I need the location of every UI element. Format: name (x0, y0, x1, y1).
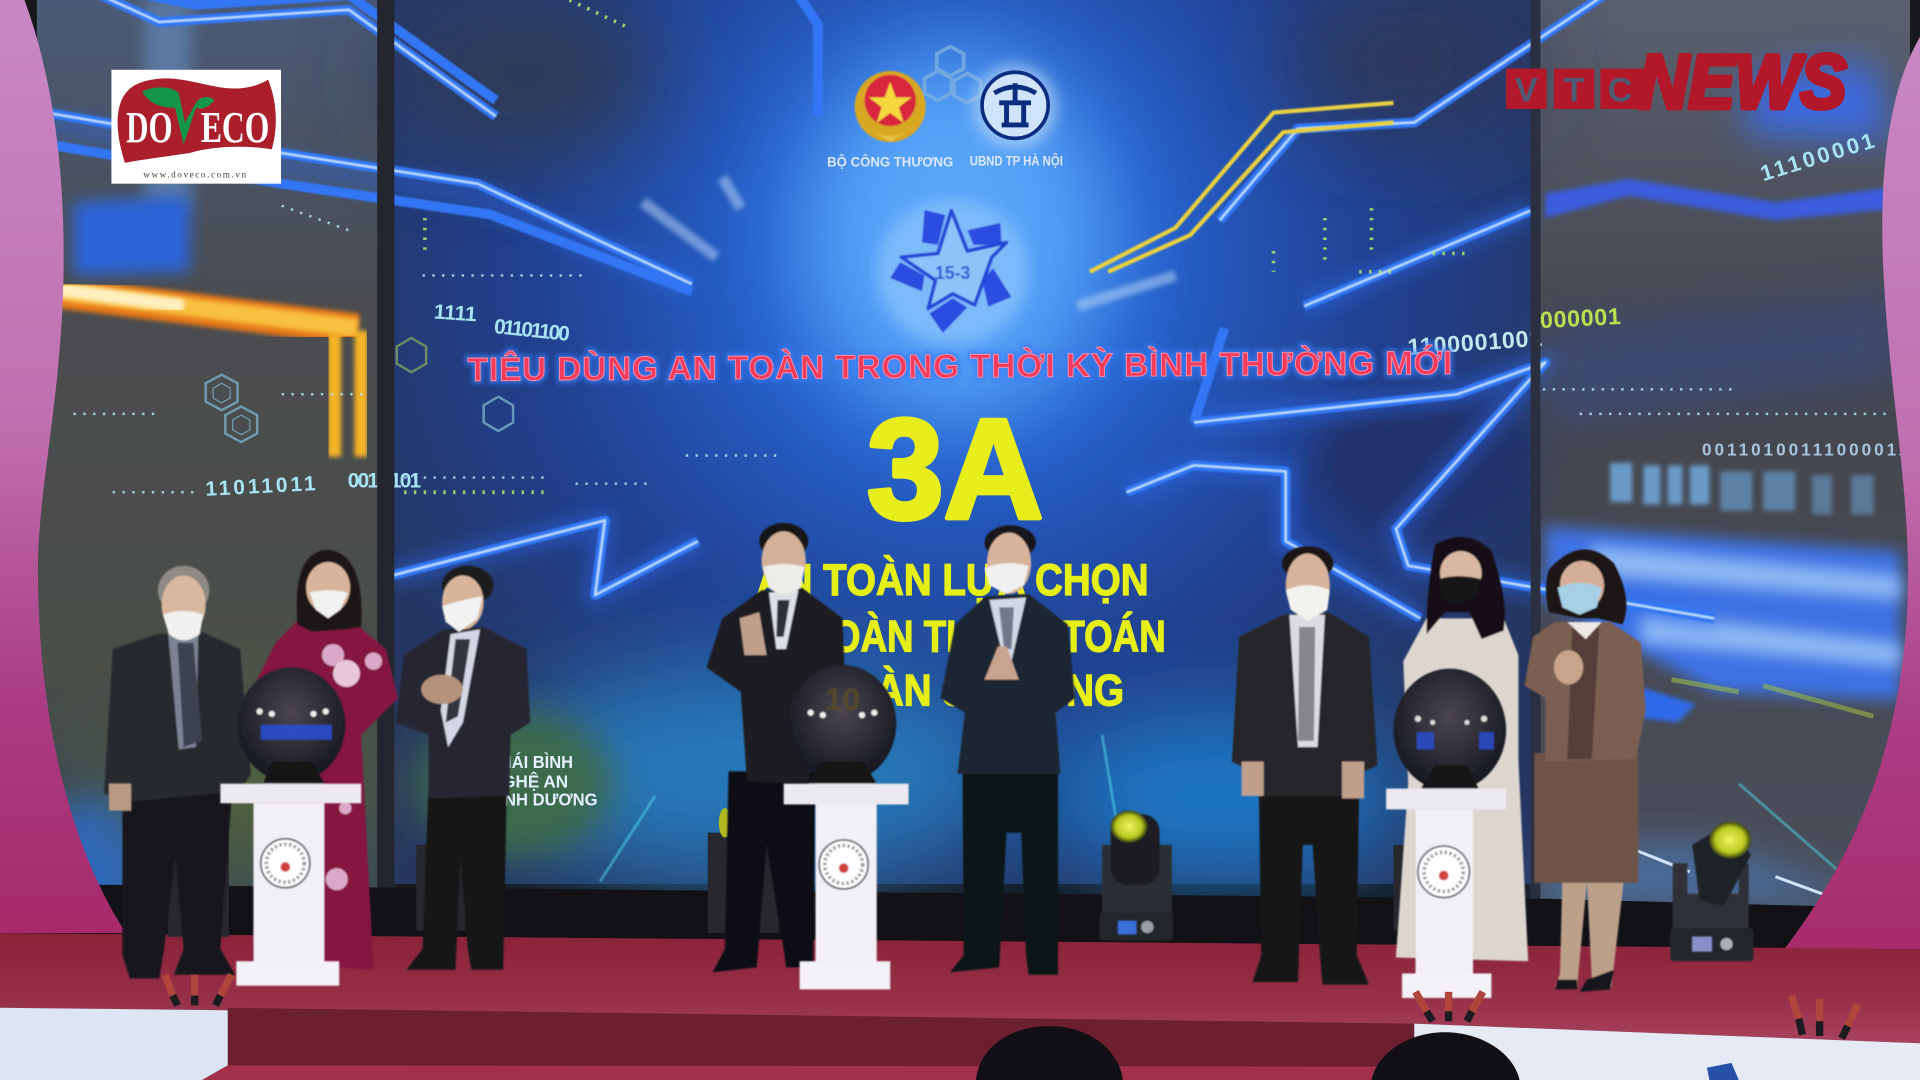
campaign headline: TIÊU DÙNG AN TOÀN TRONG THỜI KỲ BÌNH THƯỜNG MỚI (468, 344, 1452, 389)
person 6: man with striped tie (1232, 546, 1378, 984)
province list: NGHỆ AN (490, 771, 568, 791)
brand name continued: ECO (201, 103, 269, 152)
audience heads (976, 1026, 1520, 1080)
brand name: DO (126, 103, 173, 152)
black stage backing band (0, 884, 1910, 967)
binary digit decorations: 11011011 (205, 472, 316, 501)
campaign pillars text: AN TOÀN LỰA CHỌN (757, 555, 1149, 605)
pedestal logo (819, 840, 868, 889)
button sphere (789, 665, 896, 782)
organiser emblem: Hanoi (973, 65, 1057, 148)
pedestal column (1416, 809, 1473, 975)
back moving lights (168, 807, 1408, 937)
province list: THÁI BÌNH (490, 752, 573, 772)
VTC News logo: T (1564, 72, 1585, 110)
campaign headline: TIÊU DÙNG AN TOÀN TRONG THỜI KỲ BÌNH THƯỜNG MỚI (468, 344, 1452, 389)
pedestal base (236, 961, 339, 986)
dotted speckles (73, 0, 1886, 492)
pedestal 2 (784, 665, 909, 989)
15-3 star logo: 15-3 (935, 262, 970, 283)
person 3: man clapping (396, 566, 530, 970)
legs (122, 784, 235, 978)
right screen panel (1540, 0, 1910, 909)
pedestal base (800, 961, 890, 989)
stage floor (0, 933, 1920, 1043)
DOVECO logo (111, 70, 281, 184)
pink left wall (0, 0, 126, 933)
campaign pillars text (747, 555, 1166, 715)
button sphere (238, 667, 345, 782)
campaign pillars text: AN TOÀN THANH TOÁN (747, 611, 1166, 661)
screen pillars (377, 0, 1540, 906)
pedestal column (816, 804, 877, 964)
V T C boxes (1506, 69, 1547, 109)
pedestal cap (784, 784, 909, 804)
pedestal logo (1418, 846, 1469, 898)
circuit lines (47, 0, 1849, 904)
organiser emblem: national (855, 71, 926, 142)
person 5: man with palms together (940, 525, 1075, 975)
organiser labels: UBND TP HÀ NỘI (970, 151, 1063, 168)
organiser labels: BỘ CÔNG THƯƠNG (827, 153, 953, 170)
NEWS wordmark: NEWS (1638, 40, 1847, 125)
hexagons between emblems (924, 47, 981, 103)
VTC News logo (1506, 40, 1847, 125)
pedestal base (1402, 973, 1491, 998)
centre screen panel (392, 0, 1533, 884)
moving light: right (1670, 822, 1753, 961)
binary digit decorations: 1100001001 (1407, 325, 1543, 360)
confetti cannons (165, 975, 1858, 1038)
province list: BÌNH DƯƠNG (487, 790, 598, 810)
VTC News logo: C (1608, 72, 1632, 110)
red banner (118, 78, 276, 163)
pedestal logo (261, 839, 310, 888)
province list (487, 752, 598, 810)
pedestal 2: 10 (825, 681, 860, 717)
binary digit decorations: 11100001 (1757, 128, 1877, 186)
pedestal cap (1386, 789, 1506, 809)
button sphere (1393, 669, 1506, 791)
pedestal cap (220, 784, 361, 803)
person 1: grey haired man (104, 566, 251, 978)
leaf mark (142, 87, 214, 144)
binary digit decorations: 0011 101 (348, 469, 421, 492)
person 8: woman in brown suit (1524, 549, 1646, 992)
3A title: 3A (867, 390, 1043, 549)
15-3 star logo (877, 198, 1029, 345)
front white panel left (0, 1008, 228, 1080)
left screen panel (37, 0, 382, 888)
suit jacket (104, 632, 251, 802)
binary digit decorations: 00110100111000011 (1702, 440, 1908, 460)
pedestal column (253, 803, 324, 962)
VTC News logo: V (1515, 72, 1538, 110)
binary digit decorations: 000001 (1539, 303, 1621, 333)
icon on right panel (1707, 1063, 1739, 1080)
organiser labels (828, 153, 1062, 169)
pedestal 3 (1386, 669, 1506, 998)
binary digit decorations (205, 128, 1908, 501)
binary digit decorations: 1111 (433, 300, 477, 326)
person 2: woman in magenta ao dai (251, 550, 398, 970)
website: www.doveco.com.vn (143, 170, 247, 180)
stage front face (228, 1008, 1416, 1080)
person 4: man clapping (707, 523, 846, 972)
pedestal 1 (220, 667, 361, 986)
person 7: woman in white ao dai (1396, 537, 1528, 961)
binary digit decorations: 01101100 (493, 315, 571, 346)
moving light: centre right (1100, 811, 1173, 940)
campaign pillars text: AN TOÀN SỬ DỤNG (757, 664, 1124, 715)
stage step (202, 1065, 1416, 1080)
pink right wall (1778, 37, 1920, 965)
hexagon decorations (206, 338, 513, 442)
front white panel right (1414, 1024, 1920, 1080)
